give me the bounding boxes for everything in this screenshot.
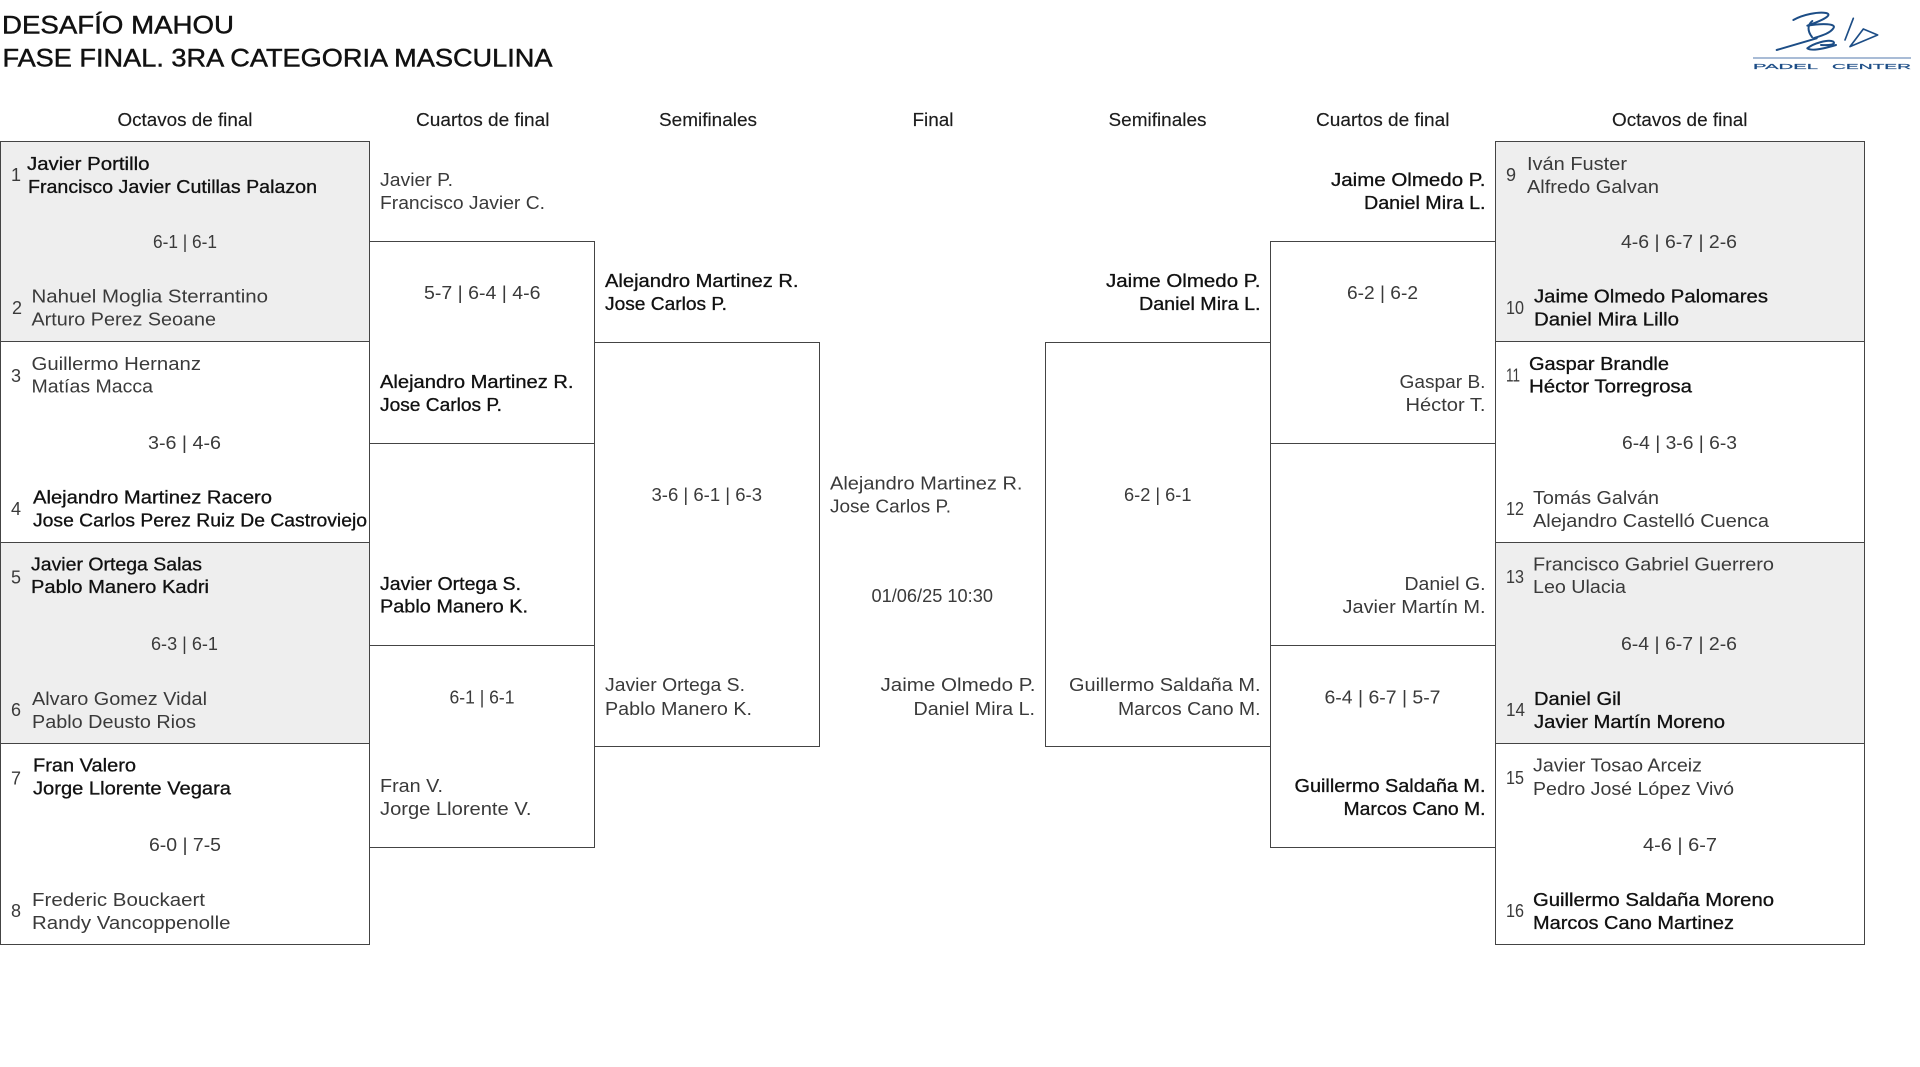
panel: final: Daniel Mira L. bbox=[914, 699, 1035, 719]
panel: left semi-final bbox=[594, 271, 820, 746]
panel: right quarter-finals: Daniel G. bbox=[1404, 574, 1486, 594]
panel: right round of 16: Francisco Gabriel Guerrero bbox=[1533, 554, 1774, 574]
panel: right round of 16: Javier Tosao Arceiz bbox=[1533, 756, 1702, 776]
panel: right semi-final bbox=[1046, 271, 1270, 746]
logo: Bela Padel Center: PADEL bbox=[1753, 62, 1818, 71]
panel: right round of 16: Alfredo Galvan bbox=[1527, 177, 1659, 197]
round headings: Octavos de final bbox=[118, 110, 252, 130]
panel: left round of 16: Nahuel Moglia Sterrantino bbox=[32, 286, 268, 306]
panel: right round of 16: Héctor Torregrosa bbox=[1529, 376, 1693, 396]
panel: left round of 16: Pablo Manero Kadri bbox=[31, 577, 209, 597]
panel: left round of 16: 5 bbox=[11, 568, 21, 588]
panel: left round of 16: 6-3 | 6-1 bbox=[151, 634, 218, 654]
panel: final: Jose Carlos P. bbox=[830, 496, 951, 516]
panel: right round of 16: 4-6 | 6-7 bbox=[1643, 835, 1717, 855]
panel: right semi-final: 6-2 | 6-1 bbox=[1124, 485, 1192, 505]
panel: right round of 16: 15 bbox=[1506, 768, 1524, 788]
panel: right round of 16: Javier Martín Moreno bbox=[1534, 712, 1725, 732]
panel: right quarter-finals: 6-4 | 6-7 | 5-7 bbox=[1324, 688, 1440, 708]
panel: left quarter-finals: Jose Carlos P. bbox=[380, 395, 502, 415]
panel: right round of 16: Daniel Gil bbox=[1534, 689, 1621, 709]
panel: right round of 16: Alejandro Castelló Cuenca bbox=[1533, 511, 1770, 531]
panel: right semi-final: Jaime Olmedo P. bbox=[1106, 271, 1260, 291]
panel: left round of 16: Jose Carlos Perez Ruiz De Castroviejo bbox=[33, 510, 367, 530]
panel: right semi-final: Marcos Cano M. bbox=[1118, 699, 1260, 719]
panel: right round of 16: Daniel Mira Lillo bbox=[1534, 310, 1679, 330]
panel: left semi-final: Alejandro Martinez R. bbox=[605, 271, 798, 291]
panel: left round of 16: Pablo Deusto Rios bbox=[32, 712, 196, 732]
round headings: Semifinales bbox=[659, 110, 757, 130]
panel: left quarter-finals: Jorge Llorente V. bbox=[380, 799, 532, 819]
panel: right quarter-finals: Daniel Mira L. bbox=[1364, 193, 1486, 213]
panel: left round of 16: Frederic Bouckaert bbox=[32, 890, 205, 910]
panel: left round of 16: Francisco Javier Cutillas Palazon bbox=[28, 177, 317, 197]
panel: left quarter-finals: Francisco Javier C. bbox=[380, 193, 545, 213]
panel: left quarter-finals bbox=[370, 170, 594, 848]
panel: left quarter-finals: Fran V. bbox=[380, 776, 443, 796]
panel: right round of 16: 13 bbox=[1506, 567, 1524, 587]
round headings: Cuartos de final bbox=[416, 110, 550, 130]
panel: left round of 16: Jorge Llorente Vegara bbox=[33, 778, 232, 798]
title: DESAFÍO MAHOU bbox=[2, 10, 234, 40]
round headings: Octavos de final bbox=[1612, 110, 1748, 130]
panel: right quarter-finals: Guillermo Saldaña M. bbox=[1294, 776, 1486, 796]
panel: final bbox=[830, 474, 1036, 719]
panel: left round of 16: 3 bbox=[11, 366, 21, 386]
round headings: Semifinales bbox=[1108, 110, 1206, 130]
panel: left round of 16: 2 bbox=[12, 298, 22, 318]
panel: left semi-final: Pablo Manero K. bbox=[605, 699, 752, 719]
panel: right round of 16: Guillermo Saldaña Moreno bbox=[1533, 890, 1774, 910]
panel: right round of 16: Leo Ulacia bbox=[1533, 577, 1627, 597]
panel: left round of 16: 6-1 | 6-1 bbox=[153, 232, 217, 252]
panel: left quarter-finals: Javier P. bbox=[380, 170, 453, 190]
title bbox=[2, 10, 553, 72]
panel: right round of 16: Pedro José López Vivó bbox=[1533, 779, 1734, 799]
panel: left round of 16: 7 bbox=[11, 768, 21, 788]
panel: left quarter-finals: 6-1 | 6-1 bbox=[450, 688, 514, 708]
panel: right quarter-finals: Marcos Cano M. bbox=[1344, 799, 1486, 819]
panel: left round of 16: 3-6 | 4-6 bbox=[148, 433, 221, 453]
panel: left semi-final: 3-6 | 6-1 | 6-3 bbox=[652, 485, 762, 505]
panel: right round of 16: 11 bbox=[1506, 366, 1520, 386]
panel: right round of 16: 12 bbox=[1506, 499, 1524, 519]
panel: left round of 16: Alejandro Martinez Racero bbox=[33, 488, 272, 508]
round headings: Cuartos de final bbox=[1316, 110, 1450, 130]
panel: left quarter-finals: 5-7 | 6-4 | 4-6 bbox=[424, 283, 540, 303]
panel: left round of 16: Arturo Perez Seoane bbox=[32, 310, 216, 330]
panel: left round of 16: Javier Portillo bbox=[27, 154, 150, 174]
panel: left semi-final: Jose Carlos P. bbox=[605, 294, 727, 314]
panel: right round of 16: 6-4 | 3-6 | 6-3 bbox=[1622, 433, 1737, 453]
logo: Bela Padel Center bbox=[1753, 13, 1911, 71]
panel: final: 01/06/25 10:30 bbox=[872, 586, 993, 606]
panel: right round of 16: Marcos Cano Martinez bbox=[1533, 913, 1734, 933]
panel: right round of 16: Iván Fuster bbox=[1527, 154, 1627, 174]
panel: final: Jaime Olmedo P. bbox=[880, 675, 1036, 695]
panel: right semi-final: Daniel Mira L. bbox=[1139, 294, 1260, 314]
round headings: Final bbox=[912, 110, 954, 130]
panel: left round of 16: Matías Macca bbox=[32, 376, 154, 396]
panel: left round of 16: 8 bbox=[11, 901, 21, 921]
panel: right round of 16: 9 bbox=[1506, 165, 1516, 185]
panel: left round of 16: Fran Valero bbox=[33, 756, 136, 776]
panel: left quarter-finals: Pablo Manero K. bbox=[380, 596, 528, 616]
panel: left quarter-finals: Javier Ortega S. bbox=[380, 574, 521, 594]
panel: right round of 16: 10 bbox=[1506, 298, 1524, 318]
panel: right round of 16 bbox=[1496, 142, 1864, 944]
panel: final: Alejandro Martinez R. bbox=[830, 474, 1022, 494]
panel: right quarter-finals: Héctor T. bbox=[1406, 395, 1486, 415]
panel: left round of 16: Javier Ortega Salas bbox=[31, 554, 202, 574]
panel: left semi-final: Javier Ortega S. bbox=[605, 675, 745, 695]
panel: right round of 16: Jaime Olmedo Palomares bbox=[1534, 286, 1768, 306]
panel: right quarter-finals bbox=[1270, 170, 1496, 848]
panel: right round of 16: 4-6 | 6-7 | 2-6 bbox=[1621, 232, 1737, 252]
panel: left quarter-finals: Alejandro Martinez R. bbox=[380, 372, 574, 392]
panel: right round of 16: 16 bbox=[1506, 901, 1524, 921]
panel: right quarter-finals: 6-2 | 6-2 bbox=[1347, 283, 1418, 303]
panel: right round of 16: 6-4 | 6-7 | 2-6 bbox=[1621, 634, 1737, 654]
panel: right quarter-finals: Gaspar B. bbox=[1400, 372, 1486, 392]
round headings bbox=[118, 110, 1748, 130]
title: FASE FINAL. 3RA CATEGORIA MASCULINA bbox=[2, 44, 553, 72]
panel: left round of 16: Guillermo Hernanz bbox=[32, 354, 201, 374]
panel: right quarter-finals: Jaime Olmedo P. bbox=[1331, 170, 1486, 190]
panel: left round of 16: 4 bbox=[11, 499, 21, 519]
logo: Bela Padel Center: CENTER bbox=[1832, 62, 1911, 71]
panel: right quarter-finals: Javier Martín M. bbox=[1342, 597, 1486, 617]
panel: right round of 16: Gaspar Brandle bbox=[1529, 354, 1669, 374]
panel: left round of 16 bbox=[0, 142, 370, 944]
panel: left round of 16: 6 bbox=[11, 700, 21, 720]
panel: right round of 16: Tomás Galván bbox=[1533, 488, 1659, 508]
panel: right round of 16: 14 bbox=[1506, 700, 1525, 720]
panel: left round of 16: Randy Vancoppenolle bbox=[32, 913, 230, 933]
panel: left round of 16: Alvaro Gomez Vidal bbox=[32, 689, 207, 709]
panel: left round of 16: 1 bbox=[11, 165, 21, 185]
panel: right semi-final: Guillermo Saldaña M. bbox=[1069, 675, 1260, 695]
panel: left round of 16: 6-0 | 7-5 bbox=[149, 835, 221, 855]
